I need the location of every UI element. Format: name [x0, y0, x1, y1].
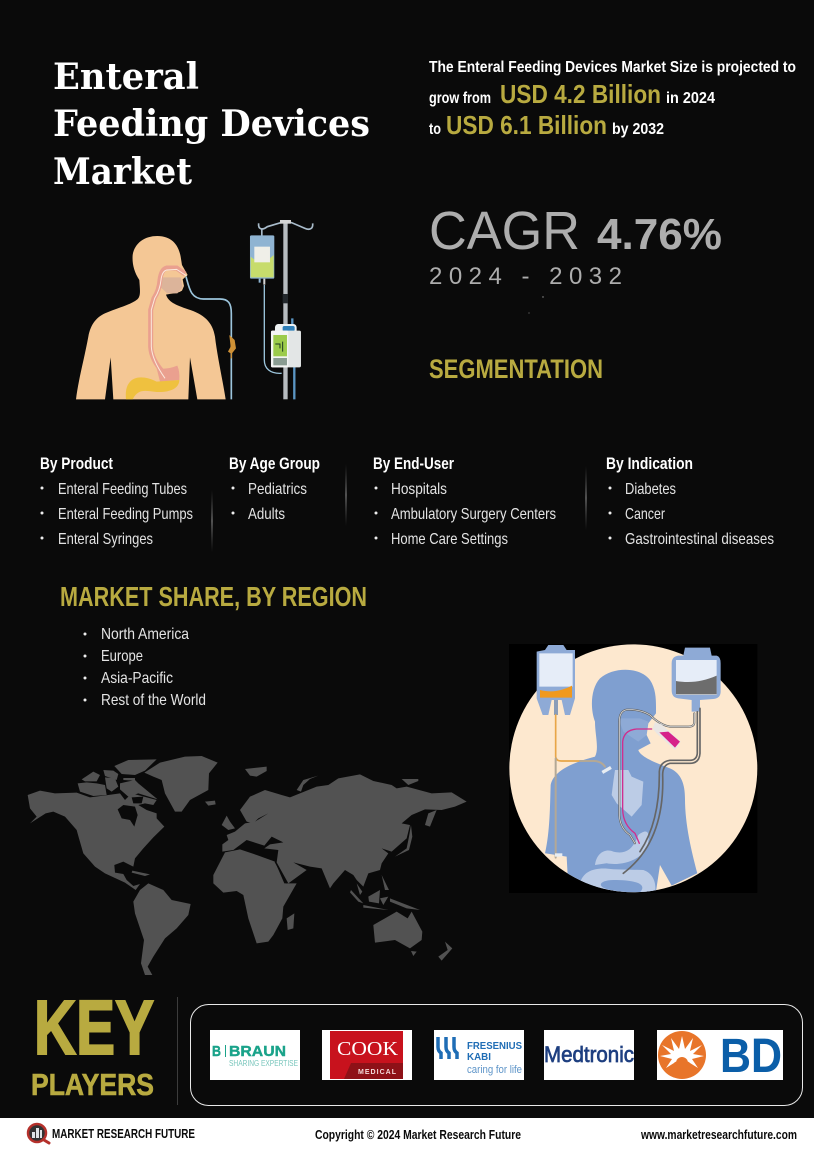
- icon: esophagus and stomach: [126, 268, 187, 399]
- title: [53, 56, 370, 193]
- logo: Medtronic: [544, 1030, 634, 1080]
- icon: heart and organs: [580, 718, 655, 892]
- segment column: by end-user: Ambulatory Surgery Centers: [391, 506, 556, 523]
- segment column: by end-user: Hospitals: [391, 481, 447, 498]
- footer bar: Copyright © 2024 Market Research Future: [315, 1127, 521, 1142]
- segment column: by indication: Gastrointestinal diseases: [625, 531, 774, 548]
- title: Feeding Devices: [53, 103, 370, 145]
- logo: B Braun: [210, 1030, 300, 1080]
- logo: BD: BD: [720, 1030, 782, 1083]
- market size statement: by 2032: [612, 121, 664, 138]
- segment column: by indication: Cancer: [625, 506, 666, 523]
- logo: Fresenius Kabi: FRESENIUS: [467, 1041, 522, 1052]
- icon: blue body silhouette: [545, 670, 697, 898]
- market size statement: USD 6.1 Billion: [446, 110, 607, 140]
- footer bar: [0, 1118, 814, 1150]
- CAGR figure: [429, 201, 722, 290]
- icon: human torso: [76, 236, 226, 399]
- segment column: by end-user: Home Care Settings: [391, 531, 508, 548]
- title: Enteral: [53, 56, 199, 98]
- segment column: by product: [40, 454, 193, 548]
- illustration: nasogastric feeding with IV pole: [76, 220, 313, 399]
- icon: feeding pump: [271, 318, 301, 399]
- heading: segmentation: SEGMENTATION: [429, 354, 603, 384]
- footer bar: MARKET RESEARCH FUTURE: [52, 1126, 195, 1141]
- segment column: by end-user: By End-User: [373, 454, 454, 473]
- icon: feeding tube: [186, 277, 231, 399]
- icon: IV pole: [259, 220, 313, 399]
- icon: market research future logo: [28, 1124, 49, 1143]
- logo: Fresenius Kabi: caring for life: [467, 1064, 522, 1076]
- region list: North America: [101, 626, 189, 643]
- region list: Europe: [101, 648, 143, 665]
- market size statement: grow from: [429, 90, 491, 107]
- logo: B Braun: B: [212, 1043, 221, 1060]
- logo: B Braun: SHARING EXPERTISE: [229, 1059, 298, 1068]
- title: Market: [53, 151, 192, 193]
- segment column: by product: Enteral Syringes: [58, 531, 153, 548]
- illustration: feeding routes through the body: [509, 644, 757, 898]
- segment column: by indication: Diabetes: [625, 481, 676, 498]
- segment column: by indication: [606, 454, 774, 548]
- CAGR figure: 4.76%: [597, 210, 722, 259]
- logo: Cook Medical: [322, 1030, 412, 1080]
- key players panel: [190, 1004, 802, 1106]
- segment column: by end-user: [373, 454, 556, 548]
- logo: B Braun: BRAUN: [229, 1043, 286, 1060]
- world map: [28, 756, 467, 975]
- heading: market share by region: MARKET SHARE, BY REGION: [60, 581, 367, 612]
- segment column: by age group: Adults: [248, 506, 285, 523]
- segment column: by product: Enteral Feeding Pumps: [58, 506, 193, 523]
- segment column: by product: By Product: [40, 454, 113, 473]
- segment column: by age group: [229, 454, 320, 523]
- segment column: by age group: Pediatrics: [248, 481, 307, 498]
- icon: right feeding bag: [672, 648, 721, 712]
- region list: Rest of the World: [101, 692, 206, 709]
- market size statement: to: [429, 121, 441, 138]
- logo: Fresenius Kabi: KABI: [467, 1052, 491, 1063]
- CAGR figure: 2024 - 2032: [429, 263, 622, 290]
- segment column: by product: Enteral Feeding Tubes: [58, 481, 187, 498]
- key players heading: PLAYERS: [31, 1067, 154, 1102]
- key players heading: [31, 985, 154, 1102]
- icon: left feeding bag: [537, 645, 575, 715]
- logo: Fresenius Kabi: [434, 1030, 524, 1080]
- icon: syringe bottle: [555, 722, 681, 857]
- logo: Cook Medical: COOK: [337, 1038, 399, 1060]
- region list: Asia-Pacific: [101, 670, 173, 687]
- logo: BD: [657, 1030, 783, 1083]
- market size statement: in 2024: [666, 90, 715, 107]
- segment column: by age group: By Age Group: [229, 454, 320, 473]
- key players heading: KEY: [34, 985, 154, 1071]
- logo: Medtronic: Medtronic: [544, 1042, 634, 1067]
- market size statement: [429, 59, 796, 140]
- logo: Cook Medical: MEDICAL: [358, 1069, 397, 1076]
- icon: feeding tubes: [556, 708, 700, 873]
- CAGR figure: CAGR: [429, 201, 580, 261]
- region list: [84, 626, 206, 709]
- market size statement: USD 4.2 Billion: [500, 79, 661, 109]
- segment column: by indication: By Indication: [606, 454, 693, 473]
- icon: feeding bag: [250, 228, 282, 373]
